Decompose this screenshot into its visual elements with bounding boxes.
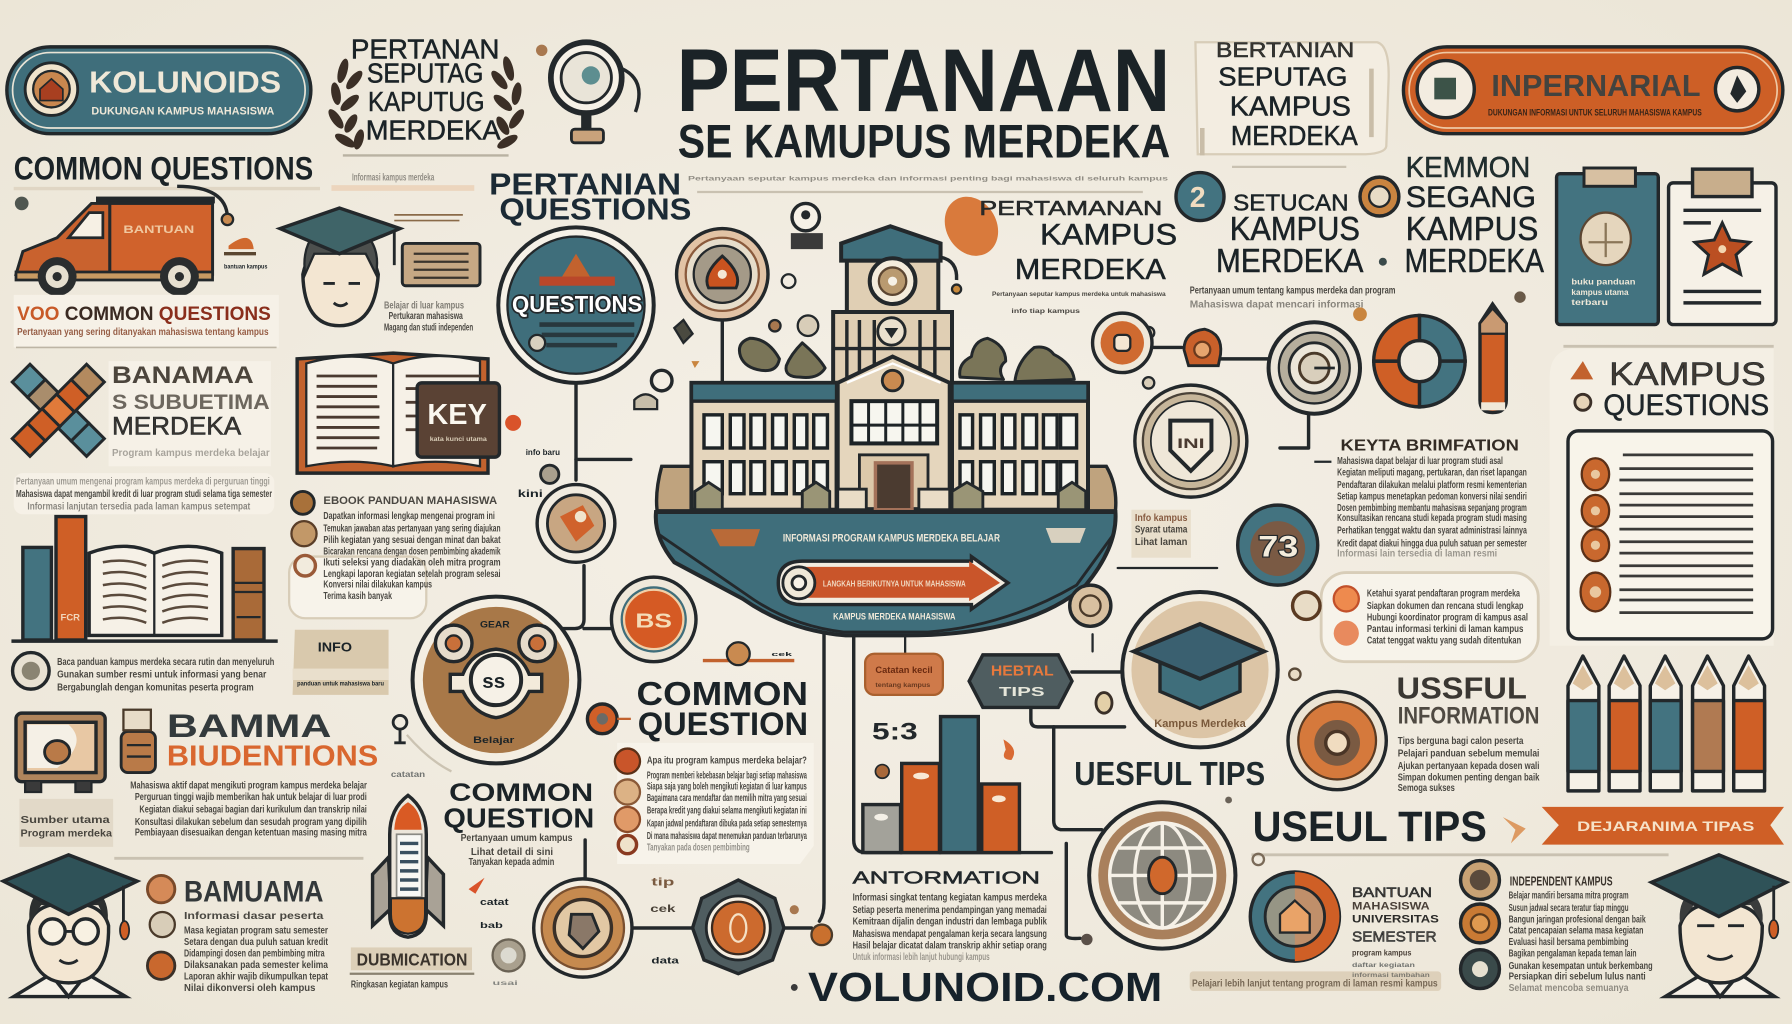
body text: left lower: Informasi lanjutan tersedia pada laman kampus setempat	[27, 502, 251, 513]
grey caption panel: Sumber utama	[21, 815, 110, 826]
text block: kemmon segang	[1405, 152, 1545, 280]
text block: key information: Perhatikan tenggat waktu dan syarat administrasi lainnya	[1337, 526, 1527, 537]
medallion: bottom tan	[534, 879, 632, 977]
icon: orange blob	[934, 187, 1009, 266]
callout panel with dots: Ketahui syarat pendaftaran program merdeka	[1367, 589, 1520, 600]
text block: common question small: QUESTION	[443, 802, 594, 833]
text block: banama merdeka: BANAMAA	[112, 362, 254, 389]
text block: bamama: BAMUAMA	[184, 876, 323, 909]
building: teal base platform: INFORMASI PROGRAM KAMPUS MERDEKA BELAJAR	[783, 533, 1000, 545]
text block: information: Setiap peserta menerima pendampingan yang memadai	[853, 905, 1047, 916]
text block: common question with dots	[587, 642, 814, 864]
small marks near questions circle: info baru	[526, 448, 560, 457]
banner: dubmication: Ringkasan kegiatan kampus	[351, 979, 448, 990]
text block: key information: Kegiatan meliputi magang, pertukaran, dan riset lapangan	[1337, 467, 1527, 478]
list: three icons and text: INDEPENDENT KAMPUS	[1510, 875, 1613, 889]
medallion: gear: ss	[482, 670, 505, 693]
badge: number two and setucan text: KAMPUS	[1230, 211, 1360, 248]
panel: orange common questions	[14, 295, 279, 347]
icon: key hook: catatan	[391, 770, 425, 779]
text block: bottom compass: daftar kegiatan	[1352, 962, 1415, 969]
body text: left lower	[14, 473, 274, 514]
text block: useful information: Semoga sukses	[1398, 783, 1455, 794]
panel: list with icons left centre: Temukan jawaban atas pertanyaan yang sering diajukan	[323, 523, 501, 534]
paper checklist	[1568, 431, 1773, 639]
text block: bamma students: BAMMA	[167, 708, 331, 744]
beige box	[293, 630, 389, 695]
text row with round icon	[13, 653, 274, 693]
text block: bottom compass	[1352, 885, 1439, 979]
ribbon: tips: DEJARANIMA TIPAS	[1577, 819, 1754, 834]
text block: bottom compass: BANTUAN	[1352, 885, 1432, 900]
panel: list with icons left centre: EBOOK PANDUAN MAHASISWA	[323, 495, 497, 507]
text chip: info note: Info kampus	[1135, 513, 1188, 524]
badge: number two and setucan text: SETUCAN	[1233, 189, 1349, 215]
text block: information: Untuk informasi lebih lanjut hubungi kampus	[853, 952, 990, 963]
callout panel with dots	[1293, 573, 1538, 662]
text block: useful information: Ajukan pertanyaan kepada dosen wali	[1398, 761, 1540, 772]
small marks around bottom circles	[469, 878, 525, 987]
building: trees	[739, 338, 1074, 382]
medallion: gear	[413, 597, 579, 763]
icon: open book with key card: kata kunci utama	[430, 436, 487, 443]
text block: common question small	[443, 779, 594, 868]
text block: common question with dots: Program memberi kebebasan belajar bagi setiap mahasiswa	[647, 770, 807, 781]
medallion: orange under platform: BS	[635, 609, 672, 632]
top right paper panel: SEPUTAG	[1218, 62, 1347, 92]
icon: crossed bars	[12, 364, 104, 456]
text block: common question small: COMMON	[449, 779, 593, 807]
heading: pertanian questions: QUESTIONS	[499, 191, 691, 226]
caption: student notes: Belajar di luar kampus	[384, 301, 464, 312]
heading: common questions: COMMON QUESTIONS	[14, 150, 313, 186]
title rule text: Pertanyaan seputar kampus merdeka dan informasi penting bagi mahasiswa di seluruh kampus	[688, 176, 1168, 183]
small floating icons around the tower	[634, 203, 1154, 409]
number medallion 73: 73	[1258, 531, 1298, 564]
icon: graduate head with cap	[280, 208, 400, 326]
callout panel with dots: Hubungi koordinator program di kampus asal	[1367, 613, 1528, 624]
icon: five pencils	[1568, 656, 1765, 791]
wreath title: MERDEKA	[366, 114, 501, 145]
small coin and hook near tips	[1289, 669, 1301, 680]
icon: delivery truck: bantuan kampus	[224, 264, 268, 271]
body text: left lower: Mahasiswa dapat mengambil kredit di luar program studi selama tiga semester	[16, 489, 272, 500]
marks around bottom orange: tip	[651, 877, 674, 889]
top right paper panel: KAMPUS	[1230, 90, 1351, 121]
text block: common question small: Pertanyaan umum kampus	[461, 833, 573, 844]
text block: common question with dots: QUESTION	[638, 706, 808, 742]
panel: list with icons left centre: Pilih kegiatan yang sesuai dengan minat dan bakat	[323, 535, 501, 546]
text block: bamma students: Kegiatan diakui sebagai bagian dari kurikulum dan transkrip nilai	[139, 805, 367, 816]
list: three icons and text: Evaluasi hasil bersama pembimbing	[1509, 937, 1629, 948]
plate: useful tips dark	[969, 655, 1072, 707]
icon: vintage tv	[16, 713, 105, 792]
text block: key information: Dosen pembimbing membantu mahasiswa sepanjang program	[1337, 503, 1527, 514]
wreath title: SEPUTAG	[367, 57, 483, 88]
panel: list with icons left centre: Bicarakan rencana dengan dosen pembimbing akademik	[323, 546, 501, 557]
donut chart	[1374, 315, 1465, 407]
text row with round icon: Gunakan sumber resmi untuk informasi yang benar	[57, 670, 266, 681]
text block: banama merdeka: S SUBUETIMA	[112, 389, 270, 414]
marks around bottom orange: cek	[650, 904, 676, 915]
panel: bottom right tips: Pelajari lebih lanjut tentang program di laman resmi kampus	[1192, 978, 1438, 989]
text block: key information: Kredit dapat diakui hingga dua puluh satuan per semester	[1337, 538, 1527, 549]
top right paper panel	[1195, 37, 1389, 167]
badge: number two and setucan text: 2	[1190, 182, 1206, 214]
text block: kemmon segang: KAMPUS	[1406, 211, 1538, 248]
top right paper panel: BERTANIAN	[1216, 37, 1354, 62]
small text rows under merdeka: Pertanyaan umum tentang kampus merdeka dan program	[1190, 286, 1395, 297]
building: teal base platform: KAMPUS MERDEKA MAHASISWA	[833, 611, 956, 621]
text block: bamama: Masa kegiatan program satu semester	[184, 926, 328, 937]
icon: graduate with glasses	[3, 855, 137, 997]
medallion: questions	[498, 227, 654, 383]
text block: banama merdeka	[109, 361, 271, 466]
badge: number two and setucan text: MERDEKA	[1216, 243, 1364, 280]
panel: list with icons left centre: Lengkapi laporan kegiatan setelah program selesai	[323, 569, 501, 580]
icon: books and open book: FCR	[61, 613, 80, 623]
panel: orange common questions: VOO COMMON QUESTIONS	[17, 303, 271, 325]
text block: bamama: Nilai dikonversi oleh kampus	[184, 983, 316, 994]
plate: useful tips dark: TIPS	[999, 685, 1045, 699]
text block: useful information: Pelajari panduan sebelum memulai	[1398, 749, 1540, 760]
icon: graduate right	[1651, 855, 1786, 997]
plate: orange label: tentang kampus	[875, 682, 930, 689]
text block: bamma students: Mahasiswa aktif dapat mengikuti program kampus merdeka belajar	[130, 781, 367, 792]
text block: information: ANTORMATION	[853, 867, 1040, 887]
caption: student notes: Magang dan studi independen	[384, 322, 473, 333]
text block: pertamanan kampus merdeka: info tiap kampus	[1011, 308, 1080, 315]
text block: useful information: Tips berguna bagi calon peserta	[1398, 736, 1524, 747]
text block: useful information: USSFUL	[1397, 670, 1527, 705]
panel: list with icons left centre: Konversi nilai dilakukan kampus	[323, 579, 432, 590]
icon: orange coin and circles top right	[1093, 313, 1221, 373]
text block: kemmon segang: KEMMON	[1406, 152, 1530, 184]
text block: kemmon segang: SEGANG	[1406, 181, 1536, 214]
text block: pertamanan kampus merdeka: MERDEKA	[1015, 254, 1166, 286]
number medallion 73	[1238, 505, 1318, 585]
small marks near questions circle	[505, 415, 560, 500]
main title	[677, 30, 1170, 168]
list: three icons and text	[1461, 861, 1653, 994]
text block: banama merdeka: Program kampus merdeka belajar	[112, 448, 270, 459]
wreath title	[326, 33, 527, 155]
heading: pertanian questions	[489, 166, 691, 226]
arrow banner	[778, 557, 1008, 609]
top right paper panel: MERDEKA	[1231, 120, 1358, 151]
banner: dubmication: DUBMICATION	[357, 950, 467, 970]
medallion: bottom orange	[693, 880, 784, 974]
text block: key information: KEYTA BRIMFATION	[1341, 437, 1519, 454]
callout panel with dots: Catat tenggat waktu yang sudah ditentukan	[1367, 635, 1521, 646]
icon: teal handbook	[1557, 168, 1658, 325]
small marks near questions circle: kini	[518, 489, 543, 500]
caption: student notes	[331, 173, 474, 333]
text block: bamma students: Pembiayaan disesuaikan dengan ketentuan masing masing mitra	[135, 827, 367, 838]
text row with round icon: Bergabunglah dengan komunitas peserta program	[57, 682, 254, 693]
panel: kampus questions	[1550, 346, 1774, 646]
list: three icons and text: Selamat mencoba semuanya	[1509, 983, 1629, 994]
icon: key hook	[391, 715, 451, 779]
text block: bamma students: Perguruan tinggi wajib memberikan hak untuk belajar di luar prodi	[135, 792, 367, 803]
text block: bamma students	[130, 708, 378, 838]
icon: rocket	[373, 795, 443, 937]
right badge pill: INPERNARIAL	[1491, 68, 1701, 103]
heading: uesful tips: UESFUL TIPS	[1074, 756, 1265, 793]
small marks around bottom circles: usai	[493, 980, 518, 987]
text block: bottom compass: program kampus	[1352, 948, 1412, 957]
icon: delivery truck: BANTUAN	[123, 224, 194, 236]
text block: bamma students: BIUDENTIONS	[167, 741, 378, 773]
panel: list with icons left centre: Terima kasih banyak	[323, 591, 392, 602]
panel: list with icons left centre	[289, 491, 501, 618]
icon: teal handbook: buku panduan	[1571, 278, 1636, 287]
text block: common question with dots: Tanyakan pada dosen pembimbing	[647, 842, 750, 853]
text block: key information: Setiap kampus menetapkan pedoman konversi nilai sendiri	[1337, 491, 1527, 502]
medallion: graduation cap	[1122, 592, 1278, 747]
caption: student notes: Pertukaran mahasiswa	[389, 311, 463, 322]
text chip: info note: Syarat utama	[1135, 525, 1188, 536]
wreath title: PERTANAN	[351, 33, 499, 64]
text block: bamama: Laporan akhir wajib dikumpulkan tepat	[184, 971, 328, 982]
text block: pertamanan kampus merdeka: Pertanyaan seputar kampus merdeka untuk mahasiswa	[992, 291, 1166, 298]
small text rows under merdeka	[1190, 286, 1526, 321]
icon: small robot tool	[121, 710, 155, 773]
mark: hook foot	[1081, 797, 1232, 945]
text block: common question with dots: Kapan jadwal pendaftaran dibuka pada setiap semesternya	[647, 818, 807, 829]
text block: information: Hasil belajar dicatat dalam transkrip akhir setiap orang	[853, 941, 1047, 952]
badge: number two and setucan text	[1176, 173, 1399, 280]
medallion: building seal: INI	[1177, 436, 1205, 451]
text block: common question with dots: COMMON	[637, 676, 808, 713]
list: three icons and text: Belajar mandiri bersama mitra program	[1509, 890, 1629, 901]
small marks around bottom circles: bab	[480, 921, 503, 930]
text block: key information: Mahasiswa dapat belajar di luar program studi asal	[1337, 456, 1503, 467]
text block: bottom compass: informasi tambahan	[1352, 972, 1430, 979]
building: teal base platform	[656, 512, 1116, 635]
text block: common question with dots: Apa itu program kampus merdeka belajar?	[647, 755, 807, 766]
text block: key information	[1314, 437, 1527, 560]
domain footer: VOLUNOID.COM	[808, 964, 1162, 1010]
text block: common question with dots: cek	[771, 652, 794, 658]
marks around bottom orange: data	[651, 955, 680, 965]
text block: pertamanan kampus merdeka: PERTAMANAN	[979, 197, 1162, 220]
text block: useful information: Simpan dokumen penting dengan baik	[1398, 773, 1540, 784]
grey caption panel: Program merdeka	[21, 829, 112, 840]
icon: teal handbook: kampus utama	[1571, 288, 1629, 297]
beige box: INFO	[318, 640, 352, 654]
medallion: questions: QUESTIONS	[512, 291, 642, 317]
list: three icons and text: Catat pencapaian selama masa kegiatan	[1509, 926, 1643, 937]
list: three icons and text: Gunakan kesempatan untuk berkembang	[1509, 961, 1653, 972]
text block: pertamanan kampus merdeka: KAMPUS	[1040, 219, 1177, 252]
list: three icons and text: Bagikan pengalaman kepada teman lain	[1509, 949, 1637, 960]
building: campus main hall	[657, 226, 1116, 511]
medallion: graduation cap: Kampus Merdeka	[1154, 718, 1246, 730]
text block: bamma students: Konsultasi dilakukan sebelum dan sesudah program yang dipilih	[135, 817, 367, 828]
plate: useful tips dark: HEBTAL	[991, 663, 1054, 679]
callout panel with dots: Pantau informasi terkini di laman kampus	[1367, 624, 1524, 635]
medallion: globe	[1089, 802, 1235, 949]
text block: key information: Konsultasikan rencana studi kepada program studi masing	[1337, 513, 1527, 524]
main title: SE KAMUPUS MERDEKA	[678, 116, 1170, 168]
small coin by chart	[1096, 693, 1112, 713]
medallion: spiral	[1269, 322, 1360, 414]
text block: information: Informasi singkat tentang kegiatan kampus merdeka	[853, 893, 1047, 904]
medallion: orange small under questions	[537, 485, 615, 562]
text block: bamama	[114, 858, 363, 994]
panel: list with icons left centre: Dapatkan informasi lengkap mengenai program ini	[323, 511, 495, 522]
ribbon: tips	[1542, 807, 1784, 845]
medallion: gear: Belajar	[473, 735, 515, 745]
small tan card	[402, 243, 480, 286]
left badge pill: DUKUNGAN KAMPUS MAHASISWA	[91, 105, 274, 117]
icon: clipboard with star	[1669, 169, 1776, 325]
small text rows under merdeka: Mahasiswa dapat mencari informasi	[1190, 299, 1364, 310]
text block: bottom compass: MAHASISWA	[1352, 901, 1430, 913]
text block: common question with dots: Di mana mahasiswa dapat menemukan panduan terbarunya	[647, 831, 807, 842]
heading: useul tips: USEUL TIPS	[1253, 803, 1487, 850]
marks around bottom orange	[650, 877, 832, 991]
panel: kampus questions: QUESTIONS	[1603, 389, 1769, 422]
text chip: info note: Lihat laman	[1135, 537, 1187, 548]
panel: bottom right tips	[1190, 854, 1669, 991]
left badge pill: KOLUNOIDS	[89, 65, 281, 100]
text block: common question small: Tanyakan kepada admin	[469, 857, 554, 868]
icon: delivery truck	[15, 186, 268, 296]
small marks around bottom circles: catat	[480, 897, 509, 907]
panel: orange common questions: Pertanyaan yang sering ditanyakan mahasiswa tentang kampus	[17, 327, 269, 338]
right badge pill: DUKUNGAN INFORMASI UNTUK SELURUH MAHASISWA KAMPUS	[1488, 107, 1702, 117]
text block: bottom compass: SEMESTER	[1352, 930, 1437, 946]
text block: key information: Informasi lain tersedia di laman resmi	[1337, 549, 1497, 560]
icon: open book with key card	[297, 353, 499, 473]
text block: bamama: Dilaksanakan pada semester kelima	[184, 960, 328, 971]
plate: orange label	[865, 654, 943, 695]
text block: common question with dots: Siapa saja yang boleh mengikuti kegiatan di luar kampus	[647, 782, 807, 793]
medallion: orange spiral	[1288, 691, 1386, 790]
text block: bamama: Didampingi dosen dan pembimbing mitra	[184, 949, 325, 960]
text chip: info note	[1131, 510, 1191, 558]
text block: banama merdeka: MERDEKA	[112, 412, 241, 440]
arrow banner: LANGKAH BERIKUTNYA UNTUK MAHASISWA	[823, 579, 966, 588]
grey caption panel	[19, 799, 113, 847]
bar chart: 5:3	[872, 718, 918, 745]
medallion: orange under platform	[611, 577, 696, 662]
text row with round icon: Baca panduan kampus merdeka secara rutin dan menyeluruh	[57, 657, 274, 668]
text block: common question with dots: Berapa kredit yang diakui selama mengikuti kegiatan ini	[647, 806, 807, 817]
medallion: gear: GEAR	[480, 619, 510, 629]
small connector coin	[1070, 585, 1111, 626]
banner: dubmication	[350, 947, 474, 990]
left badge pill	[7, 47, 311, 134]
medallion: concentric near tower	[677, 229, 768, 320]
medallion: house compass	[1250, 872, 1339, 961]
panel: list with icons left centre: Ikuti seleksi yang diadakan oleh mitra program	[323, 558, 501, 569]
connector lines	[560, 320, 1309, 939]
icon: magnifier	[536, 42, 639, 143]
icon: teal handbook: terbaru	[1571, 298, 1608, 307]
text block: useful information	[1397, 670, 1540, 794]
list: three icons and text: Susun jadwal secara teratur tiap minggu	[1509, 903, 1629, 914]
list: three icons and text: Bangun jaringan profesional dengan baik	[1509, 914, 1646, 925]
callout panel with dots: Siapkan dokumen dan rencana studi lengkap	[1367, 601, 1523, 612]
list: three icons and text: Persiapkan diri sebelum lulus nanti	[1509, 971, 1646, 982]
text block: information: Mahasiswa mendapat pengalaman kerja secara langsung	[853, 929, 1047, 940]
icon: open book with key card: KEY	[427, 399, 487, 431]
icon: books and open book	[11, 517, 278, 641]
text block: information	[853, 867, 1047, 963]
text block: bamama: Informasi dasar peserta	[184, 911, 324, 922]
plate: orange label: Catatan kecil	[875, 665, 933, 675]
caption: student notes: Informasi kampus merdeka	[352, 173, 434, 184]
text block: bottom compass: UNIVERSITAS	[1352, 913, 1439, 925]
text block: useful information: INFORMATION	[1398, 702, 1539, 729]
heading: pertanian questions: PERTANIAN	[489, 166, 681, 201]
text block: bamama: Setara dengan dua puluh satuan kredit	[184, 937, 328, 948]
beige box: panduan untuk mahasiswa baru	[297, 681, 384, 688]
main title: PERTANAAN	[677, 30, 1170, 130]
text block: common question small: Lihat detail di sini	[471, 847, 553, 858]
body text: left lower: Pertanyaan umum mengenai program kampus merdeka di perguruan tinggi	[16, 477, 270, 488]
panel: kampus questions: KAMPUS	[1609, 356, 1766, 392]
text block: kemmon segang: MERDEKA	[1405, 243, 1545, 280]
text block: information: Kemitraan dijalin dengan industri dan lembaga publik	[853, 917, 1047, 928]
wreath title: KAPUTUG	[368, 86, 485, 117]
medallion: building seal	[1135, 385, 1247, 497]
text block: key information: Pendaftaran dilakukan melalui platform resmi kementerian	[1337, 480, 1527, 491]
text block: common question with dots: Bagaimana cara mendaftar dan memilih mitra yang sesuai	[647, 793, 807, 804]
icon: orange pencil	[1480, 304, 1506, 413]
text block: pertamanan kampus merdeka	[979, 197, 1177, 315]
bar chart	[863, 717, 1019, 853]
right badge pill	[1403, 47, 1783, 134]
